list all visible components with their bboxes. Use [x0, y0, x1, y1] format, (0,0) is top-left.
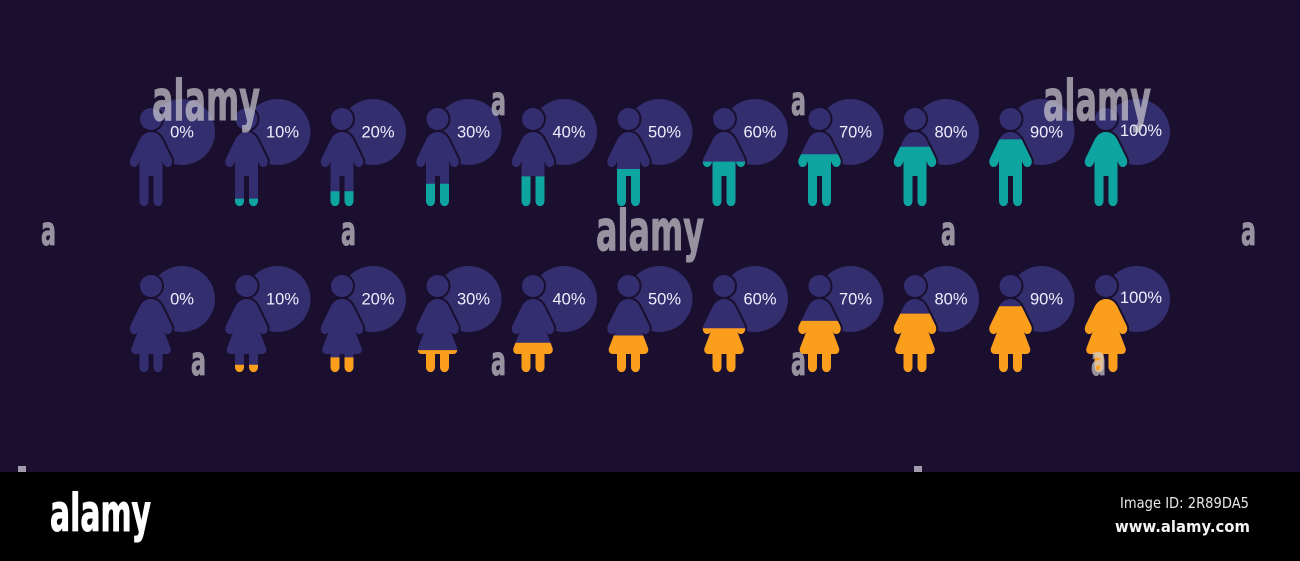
female figure 40%: 40% — [552, 290, 586, 308]
female figure 50% — [607, 266, 692, 372]
female figure 30%: 30% — [457, 290, 490, 308]
female figure 80%: 80% — [934, 290, 968, 308]
female figure 30% — [416, 266, 502, 372]
row: male pictograms — [130, 99, 1170, 206]
female figure 20%: 20% — [361, 290, 395, 308]
footer bar — [0, 472, 1300, 561]
male figure 80% — [894, 99, 979, 206]
female figure 70% — [798, 266, 884, 372]
male figure 100% — [1085, 99, 1170, 206]
watermarks: alamy — [596, 199, 704, 264]
watermarks: alamy — [1043, 69, 1151, 134]
watermarks: a — [791, 79, 806, 125]
female figure 60% — [703, 266, 788, 372]
male figure 40% — [512, 99, 597, 206]
male figure 90% — [989, 99, 1074, 206]
footer logo: alamy — [50, 484, 151, 544]
watermarks: a — [491, 339, 506, 385]
male figure 30%: 30% — [457, 124, 490, 142]
male figure 0% — [130, 99, 215, 206]
male figure 50% — [607, 99, 692, 206]
female figure 90%: 90% — [1030, 290, 1063, 308]
male figure 20% — [321, 99, 406, 206]
male figure 70%: 70% — [839, 124, 872, 142]
female figure 10% — [225, 266, 310, 372]
female figure 0% — [130, 266, 215, 372]
watermarks: alamy — [152, 69, 260, 134]
male figure 20%: 20% — [361, 124, 395, 142]
watermarks: a — [1241, 209, 1256, 255]
male figure 90%: 90% — [1030, 124, 1063, 142]
watermarks: a — [491, 79, 506, 125]
male figure 60%: 60% — [743, 124, 777, 142]
male figure 70% — [798, 99, 884, 206]
image id: Image ID: 2R89DA5 — [1120, 494, 1249, 512]
female figure 90% — [989, 266, 1074, 372]
male figure 10% — [225, 99, 310, 206]
watermarks: a — [341, 209, 356, 255]
female figure 60%: 60% — [743, 290, 777, 308]
female figure 100%: 100% — [1120, 289, 1162, 307]
watermarks: a — [791, 339, 806, 385]
row: female pictograms — [130, 266, 1170, 372]
male figure 40%: 40% — [552, 124, 586, 142]
female figure 80% — [894, 266, 979, 372]
watermarks: a — [41, 209, 56, 255]
female figure 70%: 70% — [839, 290, 872, 308]
male figure 80%: 80% — [934, 124, 968, 142]
female figure 50%: 50% — [648, 290, 681, 308]
male figure 0%: 0% — [170, 124, 194, 142]
male figure 10%: 10% — [266, 124, 299, 142]
female figure 100% — [1085, 266, 1170, 372]
male figure 30% — [416, 99, 502, 206]
watermarks: a — [1091, 339, 1106, 385]
female figure 20% — [321, 266, 406, 372]
watermarks — [18, 69, 1256, 472]
female figure 0%: 0% — [170, 290, 194, 308]
male figure 60% — [703, 99, 788, 206]
male figure 100%: 100% — [1120, 122, 1162, 140]
website: www.alamy.com — [1115, 517, 1250, 536]
watermarks: a — [191, 339, 206, 385]
male figure 50%: 50% — [648, 124, 681, 142]
female figure 10%: 10% — [266, 290, 299, 308]
female figure 40% — [512, 266, 597, 372]
watermarks: a — [941, 209, 956, 255]
